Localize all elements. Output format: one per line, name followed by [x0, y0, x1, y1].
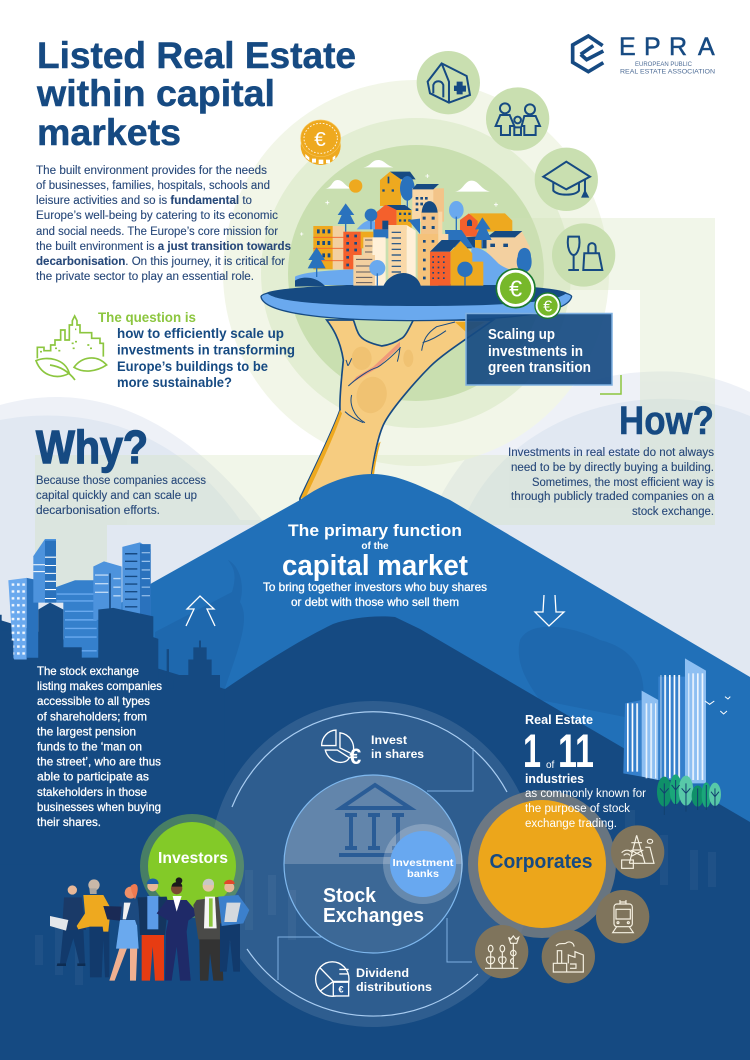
stock exchanges label: Stock [323, 885, 377, 907]
figure 1 [50, 885, 86, 966]
intro paragraph: Europe’s well-being by catering to its economic [36, 210, 278, 222]
icon: wine glass and shopping bag [568, 237, 602, 270]
question text: Europe’s buildings to be [117, 358, 268, 374]
why paragraph: decarbonisation efforts. [36, 505, 160, 517]
stock exchange listing paragraph: of shareholders; from [37, 709, 147, 723]
figure 6 [193, 879, 225, 981]
stock exchange listing paragraph: funds to the ‘man on [37, 740, 142, 754]
question text [98, 309, 295, 390]
figure 5 [157, 877, 198, 981]
stock exchange outer circle [210, 701, 536, 1027]
investment banks circle: banks [407, 868, 439, 880]
dividend distributions label [356, 966, 432, 994]
capital market heading [263, 521, 487, 609]
real estate 1 of 11 stat: exchange trading. [525, 818, 617, 830]
icon: plants [485, 936, 519, 968]
stock exchange listing paragraph: listing makes companies [37, 679, 162, 693]
investors circle: Investors [158, 850, 228, 867]
icon: family [496, 103, 540, 135]
hand holding the plate [300, 320, 493, 510]
investment banks circle: Investment [392, 857, 454, 869]
real estate 1 of 11 stat: Real Estate [525, 712, 593, 727]
how paragraph: through publicly traded companies on a [511, 491, 715, 503]
intro paragraph: leisure activities and so is fundamental to [36, 195, 252, 207]
real estate 1 of 11 stat: industries [525, 771, 584, 786]
EPRA logo: EUROPEAN PUBLIC [635, 61, 692, 68]
capital market heading: of the [361, 541, 389, 552]
EPRA logo [573, 33, 715, 76]
bull and bear silhouettes [155, 560, 644, 720]
capital market heading: or debt with those who sell them [291, 595, 459, 609]
industry icons [475, 825, 664, 983]
stock exchange listing paragraph: accessible to all types [37, 694, 150, 708]
stock exchanges label [323, 885, 424, 927]
icon: graduation cap [543, 162, 590, 197]
capital market heading: capital market [282, 550, 468, 582]
mid-blue mountain [0, 474, 750, 1060]
plate [261, 284, 572, 321]
front red house [430, 240, 483, 286]
scaling up box: investments in [488, 344, 583, 360]
question text: The question is [98, 309, 196, 325]
icon: exchange building [339, 785, 411, 855]
corporates circle: Corporates [490, 851, 592, 873]
green euro coins [496, 269, 560, 318]
investors group illustration [50, 877, 249, 981]
gold euro coin: € [314, 128, 326, 151]
real estate 1 of 11 stat: 11 [558, 724, 594, 777]
scaling up box: green transition [488, 360, 591, 376]
how paragraph: Sometimes, the most efficient way is [532, 477, 714, 489]
figure 7 [218, 880, 249, 972]
background hills [0, 371, 750, 720]
invest in shares label: Invest [371, 733, 407, 747]
arrow up [186, 596, 215, 626]
real estate 1 of 11 stat: of [546, 760, 555, 771]
how paragraph [508, 447, 715, 518]
question text: more sustainable? [117, 374, 232, 390]
stock exchange listing paragraph: their shares. [37, 815, 101, 829]
EPRA logo: P [644, 33, 661, 61]
real estate 1 of 11 stat: as commonly known for [525, 788, 646, 800]
how paragraph: stock exchange. [632, 506, 714, 518]
intro paragraph: The built environment provides for the needs [36, 165, 267, 177]
corporates circle [468, 790, 616, 938]
how paragraph: Investments in real estate do not always [508, 447, 714, 459]
EPRA logo: REAL ESTATE ASSOCIATION [620, 68, 715, 76]
real estate 1 of 11 stat: the purpose of stock [525, 803, 630, 815]
intro paragraph: of businesses, families, hospitals, schools and [36, 180, 270, 192]
back buildings [357, 172, 530, 272]
capital market heading: The primary function [288, 521, 462, 540]
why paragraph: capital quickly and can scale up [36, 490, 197, 502]
stock exchange listing paragraph: businesses when buying [37, 800, 161, 814]
title: markets [37, 112, 181, 153]
stock exchange listing paragraph: the street’, who are thus [37, 755, 161, 769]
EPRA logo: E [619, 33, 636, 61]
icon: shares pie with euro [322, 730, 361, 769]
stock exchange listing paragraph: The stock exchange [37, 664, 139, 678]
investors circle [140, 814, 244, 918]
scaling up box: Scaling up [488, 327, 555, 343]
title: within capital [36, 73, 275, 114]
intro paragraph: the private sector to play an essential role. [36, 271, 254, 283]
icon: shares pie with euro: € [349, 744, 361, 769]
capital market heading: To bring together investors who buy shares [263, 580, 487, 594]
title [36, 35, 356, 153]
intro paragraph: the built environment is a just transition towards [36, 241, 291, 253]
middle buildings [313, 201, 448, 286]
gold euro coin [301, 120, 341, 165]
stock exchanges label: Exchanges [323, 905, 424, 927]
EPRA logo: A [698, 33, 715, 61]
faint candlesticks [35, 810, 716, 985]
icon: hospital house [428, 63, 470, 103]
EPRA logo: R [669, 33, 687, 61]
invest in shares label [371, 733, 424, 761]
icon circles: buildings and needs [417, 51, 615, 287]
figure 2 [77, 879, 111, 977]
stock exchange listing paragraph: stakeholders in those [37, 785, 147, 799]
figure 4 [137, 878, 168, 981]
city on the plate [295, 160, 536, 287]
green euro coins: € [543, 299, 552, 316]
icon: green city with leaves [36, 316, 107, 380]
heading: Why?: Why? [36, 421, 148, 473]
dividend distributions label: Dividend [356, 966, 409, 980]
question text: how to efficiently scale up [117, 325, 284, 341]
intro paragraph: and social needs. The Europe’s core mission for [36, 226, 278, 238]
title: Listed Real Estate [37, 35, 356, 76]
icon: dividend pie [316, 962, 349, 996]
left city skyline [0, 539, 225, 864]
why paragraph: Because those companies access [36, 475, 206, 487]
arrow down [535, 595, 564, 626]
dark lower field [0, 616, 750, 1060]
icon: train [613, 900, 633, 933]
stock exchange listing paragraph: able to participate as [37, 770, 149, 784]
how paragraph: need to be by directly buying a building. [511, 462, 714, 474]
intro paragraph [36, 165, 291, 283]
real estate 1 of 11 stat [523, 712, 646, 830]
scaling up box [466, 314, 621, 394]
icon: factory [553, 942, 583, 972]
real estate 1 of 11 stat: 1 [523, 724, 541, 777]
trees and bushes [295, 203, 532, 287]
icon: energy [622, 835, 654, 868]
investment banks circle [383, 824, 463, 904]
right towers, trees and birds [623, 658, 730, 815]
green euro coins: € [509, 276, 522, 302]
intro paragraph: decarbonisation. On this journey, it is critical for [36, 256, 285, 268]
light hill right [468, 247, 536, 285]
heading: How?: How? [619, 399, 714, 443]
icon: dividend pie: € [338, 984, 344, 996]
stock exchange listing paragraph: the largest pension [37, 724, 136, 738]
why paragraph [36, 475, 206, 517]
dividend distributions label: distributions [356, 980, 432, 994]
concentric green circles [223, 80, 609, 466]
invest in shares label: in shares [371, 747, 424, 761]
figure 3 [103, 884, 144, 981]
question text: investments in transforming [117, 342, 295, 358]
pale green frame bands [35, 218, 715, 595]
stock exchange listing paragraph [37, 664, 162, 829]
stock exchange inner circle [284, 775, 462, 953]
clouds, sun and stars [300, 160, 498, 236]
